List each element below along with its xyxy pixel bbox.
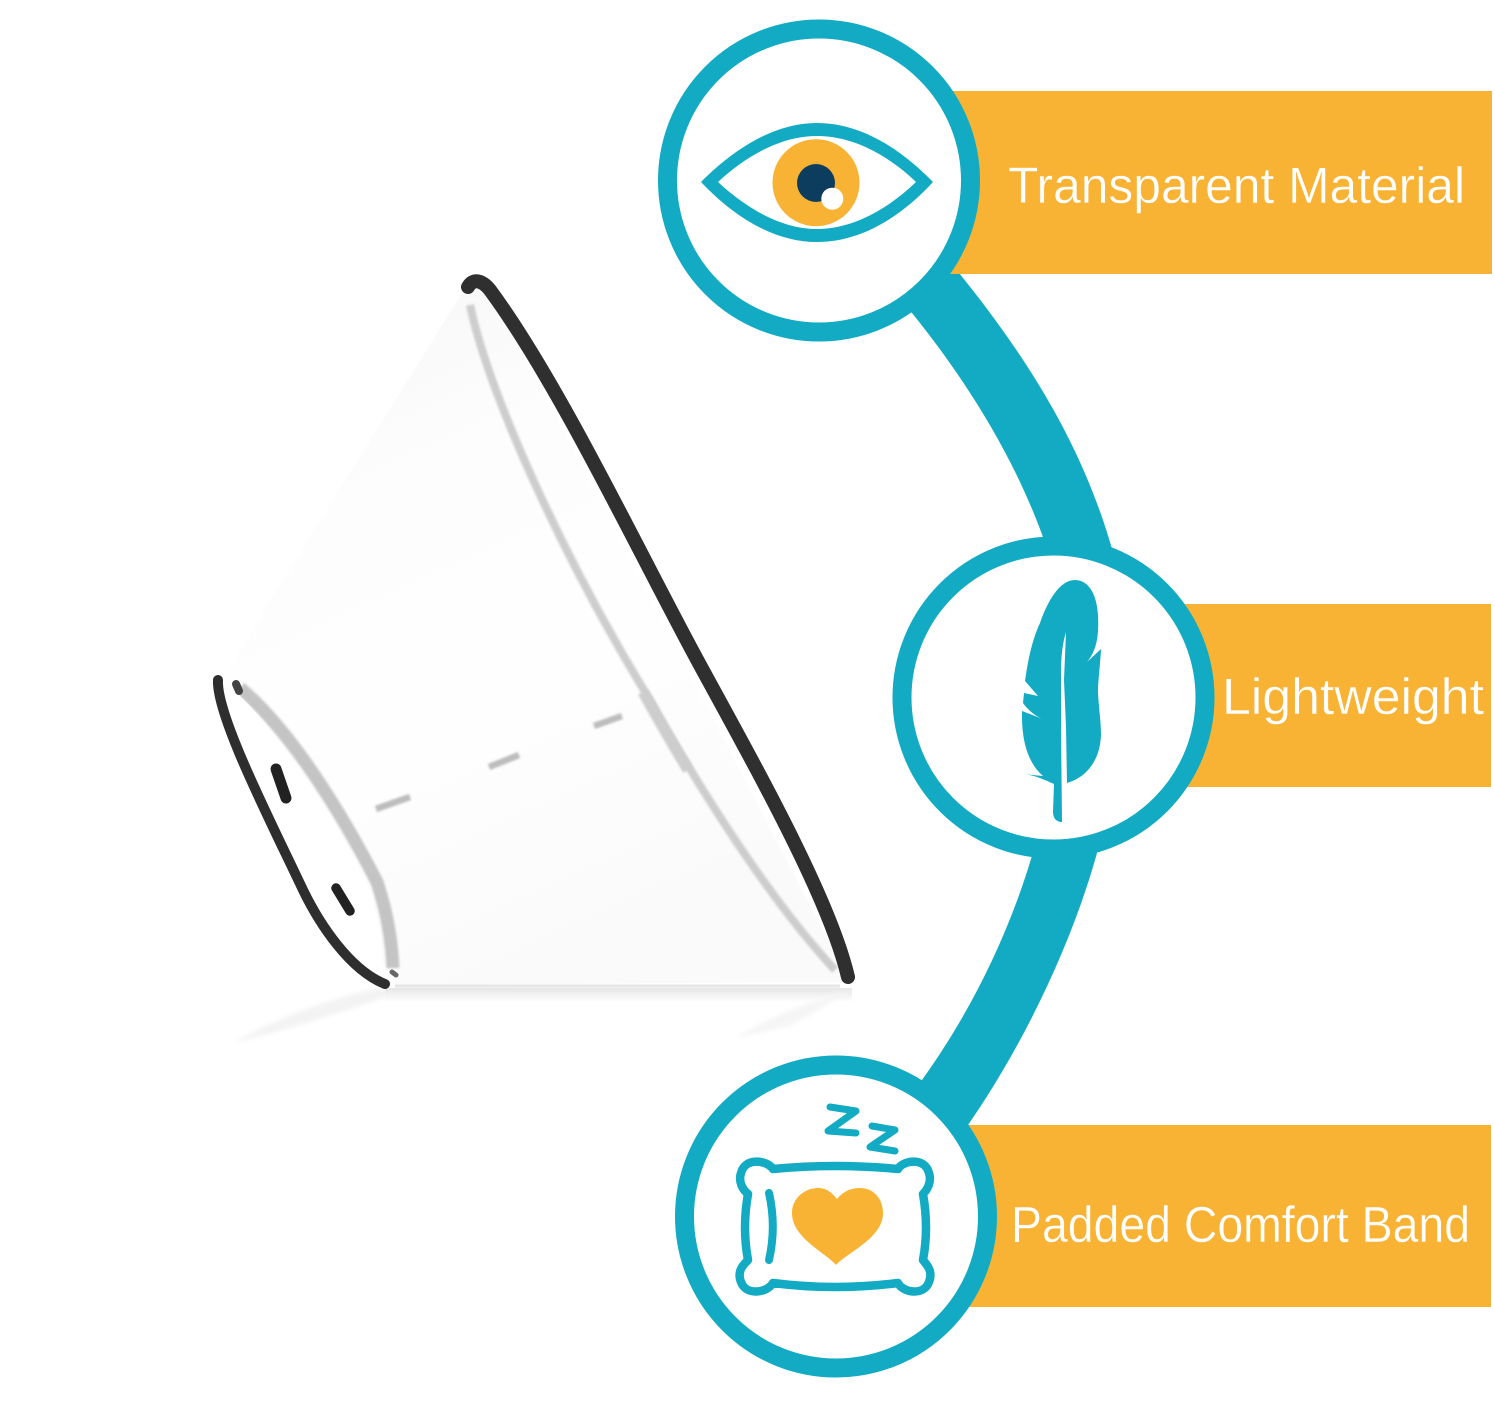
inner rim shadow	[470, 305, 835, 970]
cone body	[226, 282, 850, 985]
small dark rim	[218, 680, 385, 984]
small ring shadow	[240, 688, 393, 968]
circle icon: feather	[902, 546, 1205, 849]
floor reflection	[233, 988, 852, 1043]
highlight	[821, 188, 843, 210]
label: Transparent Material	[1008, 157, 1465, 214]
pillow crease	[769, 1193, 773, 1260]
connector arc: top to middle	[880, 240, 1114, 556]
cone marks	[376, 716, 622, 809]
pillow outline	[740, 1162, 930, 1292]
floor edge line	[395, 984, 840, 988]
heart	[792, 1188, 883, 1265]
rim slots	[276, 769, 286, 798]
dark outer rim	[468, 281, 848, 977]
circle icon: pillow	[684, 1065, 988, 1368]
banner: Padded Comfort Band	[960, 1125, 1491, 1307]
rim shadow thick section	[643, 692, 688, 770]
cone collar product image	[218, 281, 852, 1043]
pupil	[797, 164, 835, 202]
banner: Lightweight	[1170, 604, 1491, 787]
connector arc: middle to bottom	[900, 830, 1097, 1150]
small ring face	[226, 680, 383, 978]
label: Lightweight	[1222, 668, 1484, 725]
feather	[1022, 580, 1101, 822]
eye outline	[701, 123, 933, 242]
sleeping Z marks	[828, 1107, 895, 1151]
iris	[772, 139, 860, 226]
banner: Transparent Material	[945, 91, 1492, 274]
circle icon: eye	[668, 29, 970, 332]
